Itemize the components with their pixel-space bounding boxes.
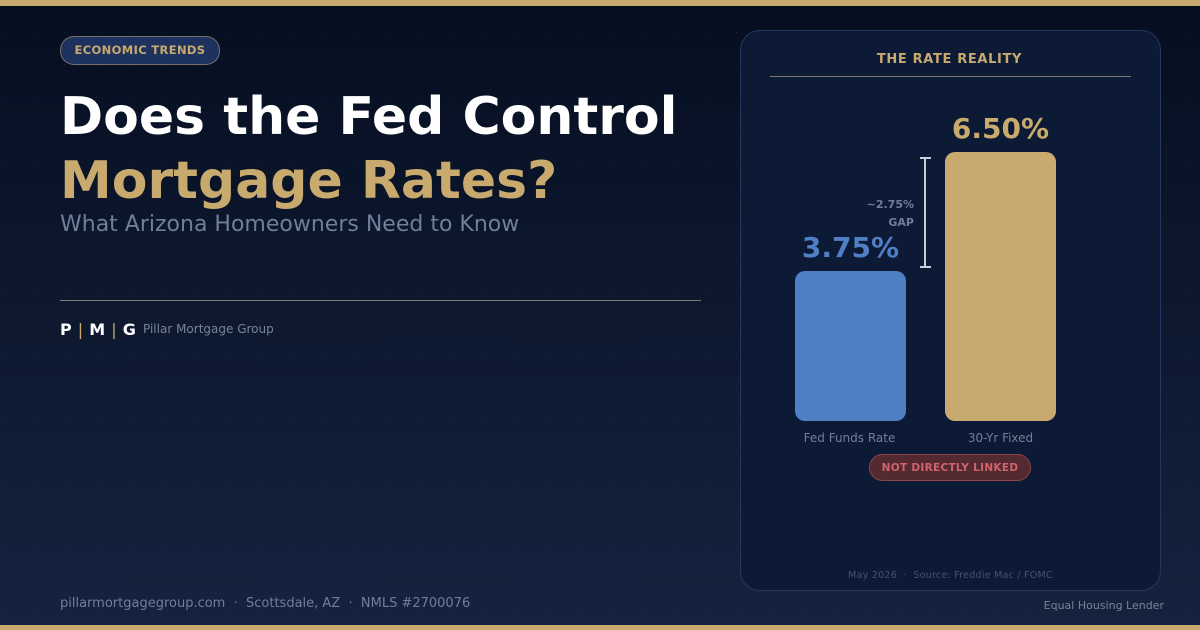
value: 6.50%: 6.50% — [952, 112, 1049, 145]
company name: Pillar Mortgage Group — [143, 322, 274, 336]
equal housing lender: Equal Housing Lender — [1044, 599, 1164, 612]
source note: May 2026 · Source: Freddie Mac / FOMC — [848, 570, 1053, 581]
top accent bar — [0, 0, 1200, 6]
heading rule — [770, 76, 1131, 77]
not directly linked badge: NOT DIRECTLY LINKED — [882, 462, 1018, 474]
not directly linked badge — [869, 454, 1031, 481]
label: 30-yr fixed: 30-Yr Fixed — [968, 431, 1033, 445]
category badge: ECONOMIC TRENDS — [75, 43, 205, 57]
footer contact: pillarmortgagegroup.com · Scottsdale, AZ · NMLS #2700076 — [60, 596, 470, 611]
gap bracket — [920, 157, 931, 268]
title: Does the Fed Control — [60, 87, 677, 147]
value: 3.75%: 3.75% — [802, 231, 899, 264]
logo: PMG wordmark: P | M | G — [60, 320, 136, 339]
title: Mortgage Rates? — [60, 151, 557, 211]
subtitle: What Arizona Homeowners Need to Know — [60, 212, 519, 237]
bottom accent bar — [0, 625, 1200, 630]
panel: the rate reality — [740, 30, 1161, 591]
gap label: ~2.75% — [867, 198, 914, 211]
gap label: GAP — [888, 216, 914, 229]
title — [60, 87, 677, 211]
bar: fed funds rate — [795, 271, 906, 421]
category badge — [60, 36, 220, 65]
panel heading: THE RATE REALITY — [877, 52, 1022, 67]
divider — [60, 300, 701, 301]
bar: 30-yr fixed — [945, 152, 1056, 421]
label: fed funds rate: Fed Funds Rate — [804, 431, 895, 445]
gap label — [867, 198, 914, 229]
